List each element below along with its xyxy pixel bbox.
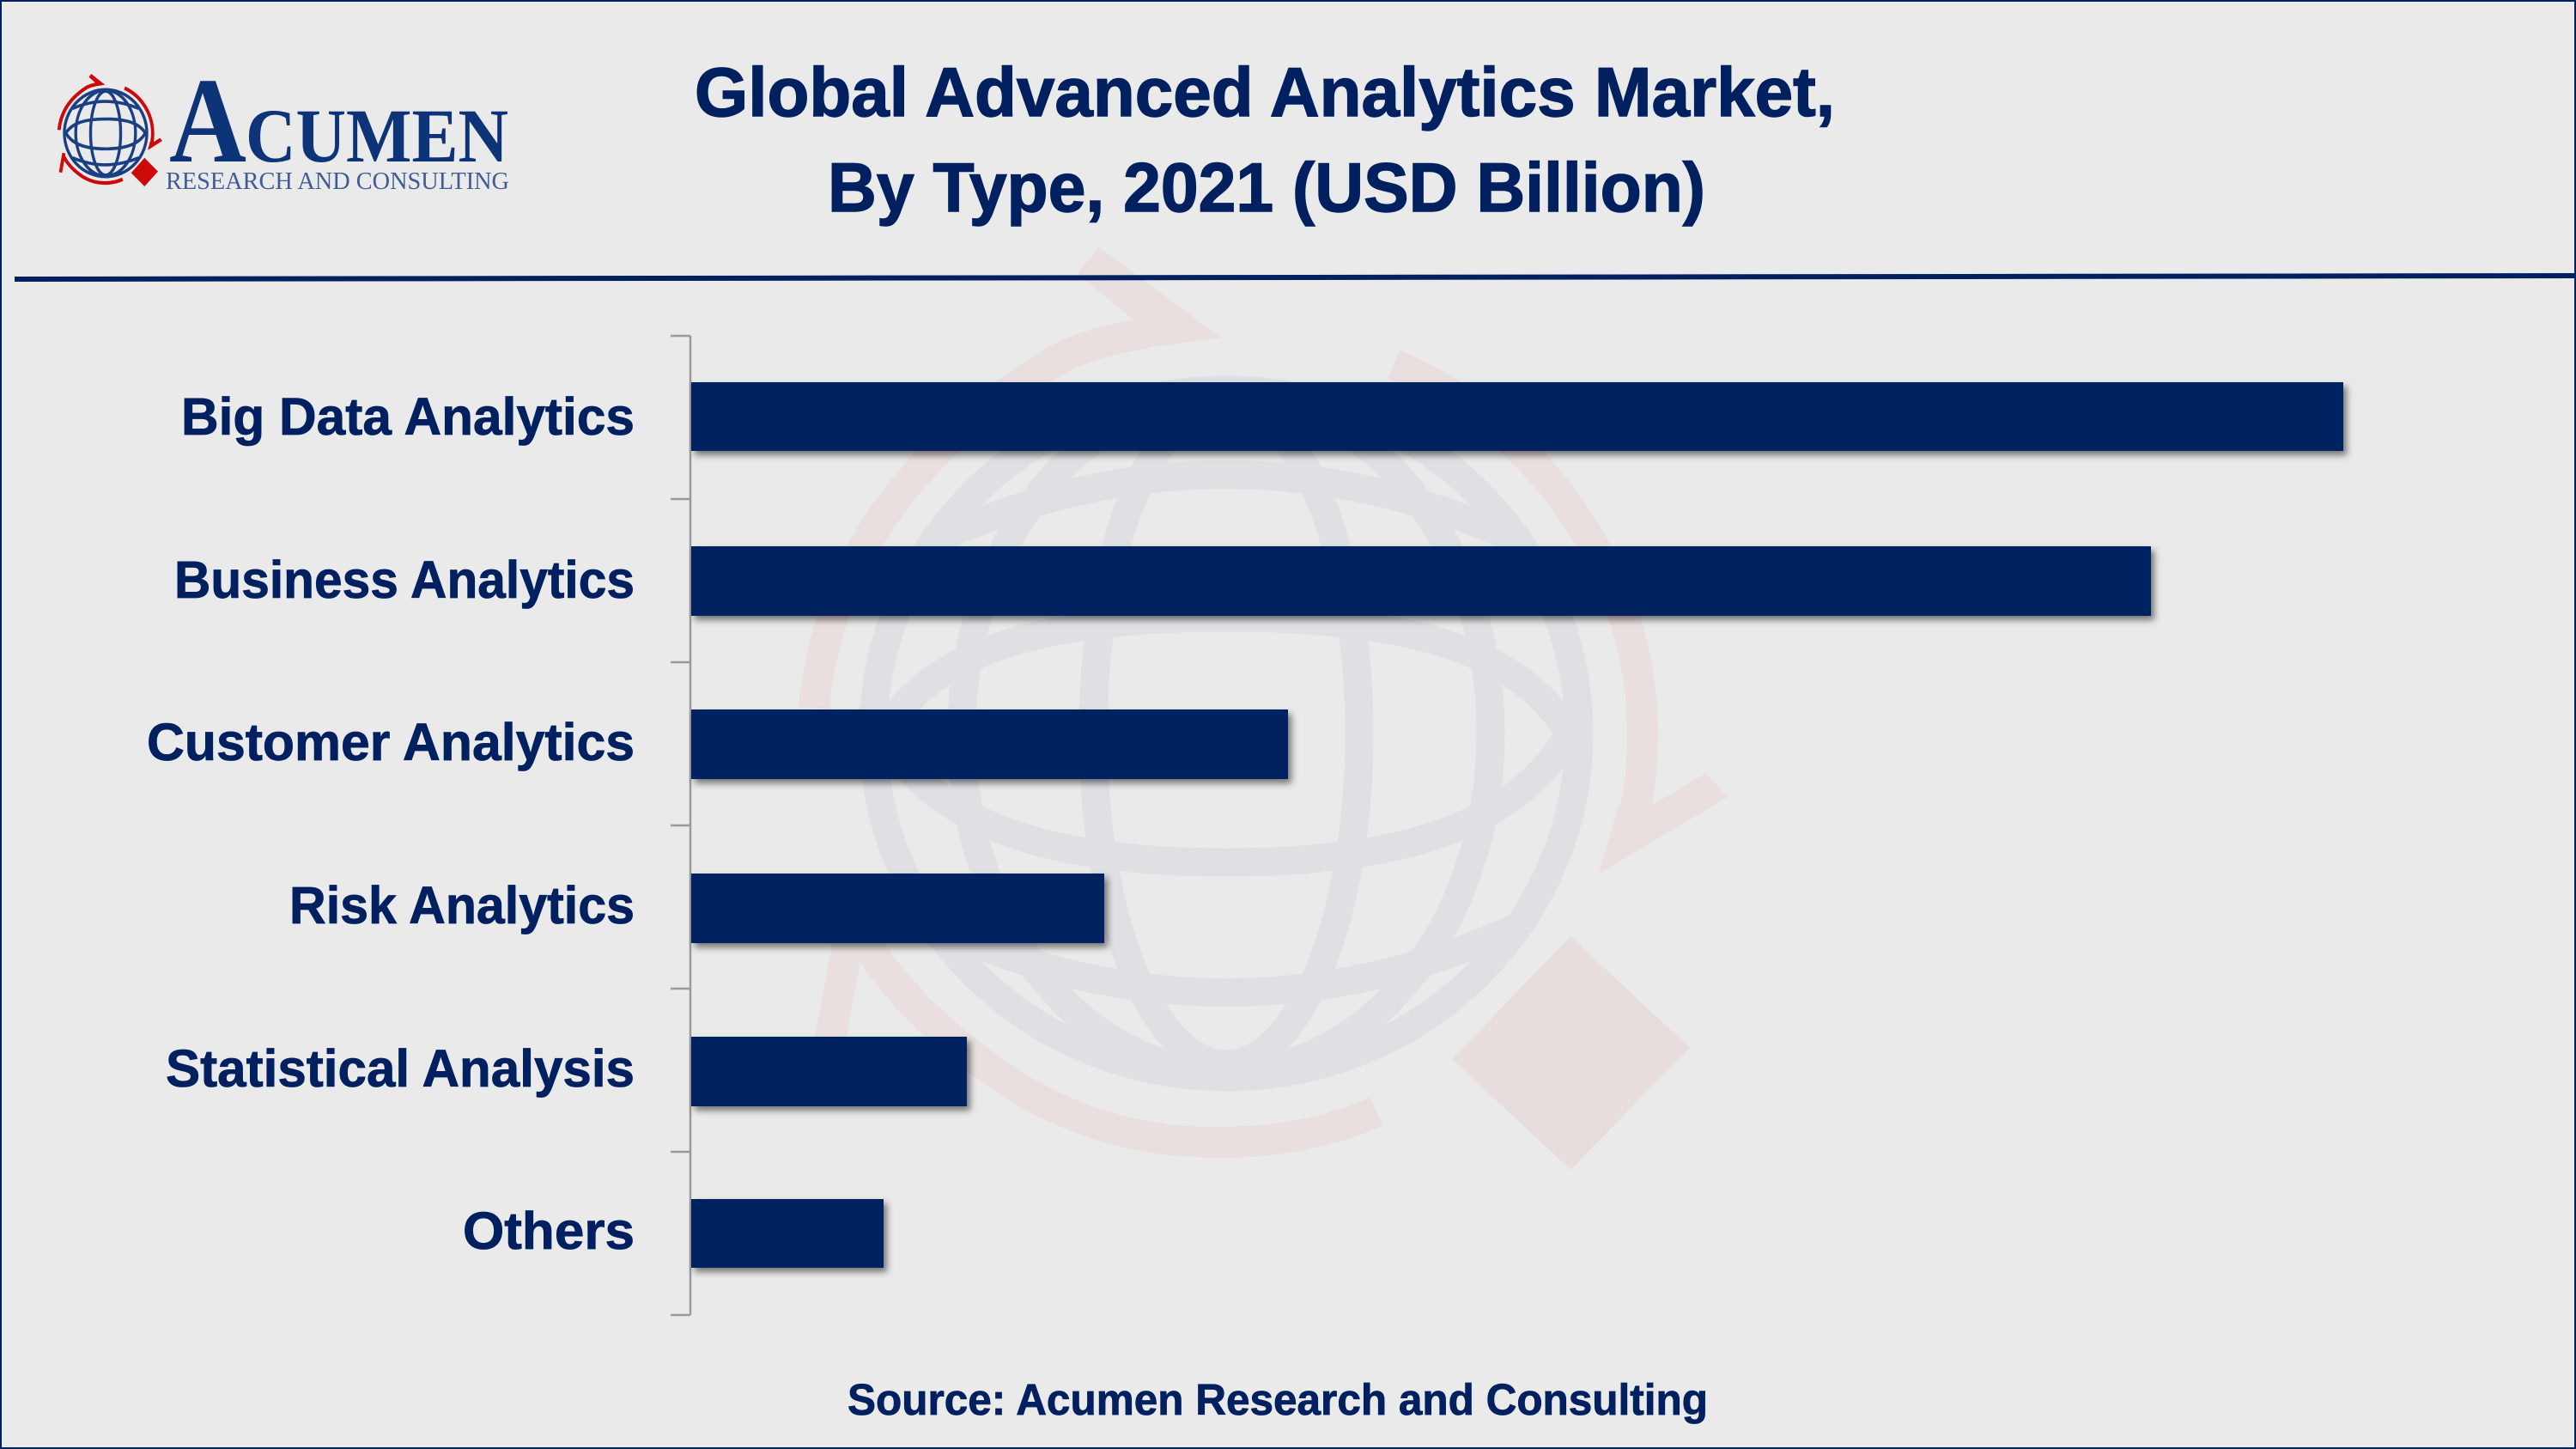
label: Customer Analytics: Customer Analytics — [147, 713, 635, 771]
source note: Source: Acumen Research and Consulting — [848, 1375, 1708, 1424]
label: Business Analytics: Business Analytics — [174, 551, 635, 609]
label: Risk Analytics: Risk Analytics — [289, 876, 635, 935]
bar: Statistical Analysis — [691, 1037, 967, 1106]
label: Statistical Analysis: Statistical Analysis — [166, 1039, 635, 1098]
label: Others: Others — [463, 1202, 635, 1260]
logo wordmark — [169, 52, 508, 188]
logo wordmark: CUMEN — [246, 94, 508, 179]
logo tagline: RESEARCH AND CONSULTING — [166, 167, 509, 195]
bar: Risk Analytics — [691, 874, 1104, 943]
label: Big Data Analytics: Big Data Analytics — [181, 387, 635, 446]
bar: Others — [691, 1199, 884, 1268]
title: By Type, 2021 (USD Billion) — [828, 149, 1705, 227]
icon: globe with red arrows and diamond — [59, 74, 162, 186]
header divider — [15, 273, 2576, 282]
bar: Customer Analytics — [691, 709, 1288, 779]
axis — [671, 336, 690, 1315]
bar: Big Data Analytics — [691, 382, 2343, 451]
bar chart: market size by type — [147, 336, 2343, 1315]
bar: Business Analytics — [691, 546, 2151, 616]
logo wordmark: A — [169, 52, 246, 188]
watermark: faded Acumen globe logo — [814, 247, 1728, 1170]
logo: Acumen Research and Consulting — [59, 52, 509, 195]
title — [695, 54, 1835, 227]
title: Global Advanced Analytics Market, — [695, 54, 1835, 131]
